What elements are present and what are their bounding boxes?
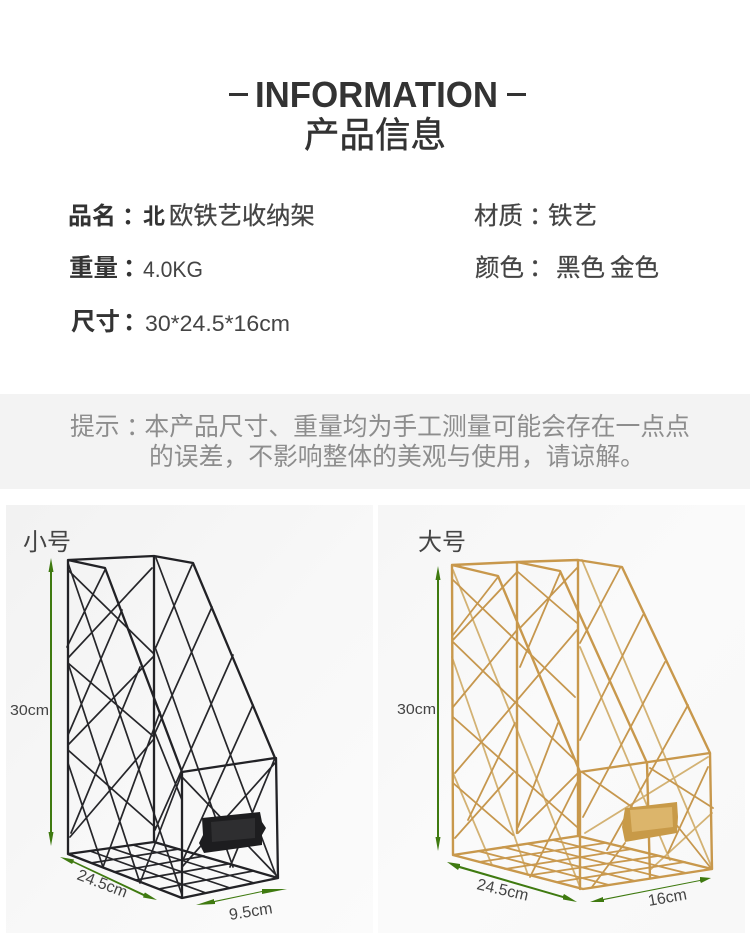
dimension: height 30cm: 30cm bbox=[10, 702, 49, 719]
panel: large gold rack bbox=[378, 505, 745, 933]
dimension: depth 24.5cm bbox=[447, 862, 577, 905]
dimension: width 9.5cm bbox=[196, 889, 287, 924]
dimension: width 9.5cm: 9.5cm bbox=[228, 900, 274, 924]
spec: colours: ： bbox=[529, 255, 554, 282]
spec: size: ： bbox=[123, 309, 148, 336]
nameplate bbox=[622, 802, 678, 842]
rack: black wire organiser bbox=[67, 556, 278, 898]
spec: product name: ： bbox=[122, 203, 146, 230]
spec: product name: 北 bbox=[143, 204, 165, 229]
spec: colours: 黑色 bbox=[556, 254, 605, 282]
spec: colours: 金色 bbox=[610, 254, 659, 282]
rack: gold wire organiser bbox=[452, 560, 713, 889]
spec: weight: 重量 bbox=[69, 254, 118, 282]
spec: weight: 4.0KG bbox=[143, 257, 203, 282]
dimension: height 30cm bbox=[10, 558, 54, 846]
spec: material bbox=[474, 202, 597, 230]
dimension: height 30cm bbox=[397, 566, 440, 851]
dimension: height 30cm: 30cm bbox=[397, 701, 436, 718]
spec: product name: 欧铁艺收纳架 bbox=[169, 203, 315, 230]
dimension: depth 24.5cm bbox=[60, 857, 157, 902]
notice band: 提示 bbox=[70, 413, 120, 441]
spec: material: 材质 bbox=[474, 202, 523, 230]
dimension: width 16cm: 16cm bbox=[647, 886, 688, 910]
heading: 产品信息: 产品信息 bbox=[304, 115, 446, 155]
spec: product name bbox=[68, 203, 315, 230]
label: small size: 小号 bbox=[23, 529, 71, 556]
notice band: 的误差，不影响整体的美观与使用，请谅解。 bbox=[149, 443, 645, 471]
panel: small black rack bbox=[6, 505, 373, 933]
label: large size: 大号 bbox=[418, 529, 466, 556]
dimension: width 16cm bbox=[590, 877, 711, 910]
notice band: 本产品尺寸、重量均为手工测量可能会存在一点点 bbox=[144, 413, 690, 441]
spec: size bbox=[71, 308, 290, 336]
heading: INFORMATION with side dashes: INFORMATION bbox=[255, 74, 498, 115]
spec: weight bbox=[69, 254, 203, 282]
spec: material: ： bbox=[529, 203, 554, 230]
spec: weight: ： bbox=[123, 255, 148, 282]
spec: size: 30*24.5*16cm bbox=[145, 311, 290, 336]
spec: size: 尺寸 bbox=[71, 308, 120, 336]
notice band: ： bbox=[126, 414, 151, 441]
dimension: depth 24.5cm: 24.5cm bbox=[475, 876, 530, 905]
spec: colours: 颜色 bbox=[475, 254, 524, 282]
spec: product name: 品名 bbox=[68, 203, 116, 230]
spec: material: 铁艺 bbox=[548, 202, 597, 230]
spec: colours bbox=[475, 254, 659, 282]
nameplate bbox=[199, 812, 266, 853]
notice band bbox=[0, 394, 750, 489]
dimension: depth 24.5cm: 24.5cm bbox=[75, 867, 130, 902]
